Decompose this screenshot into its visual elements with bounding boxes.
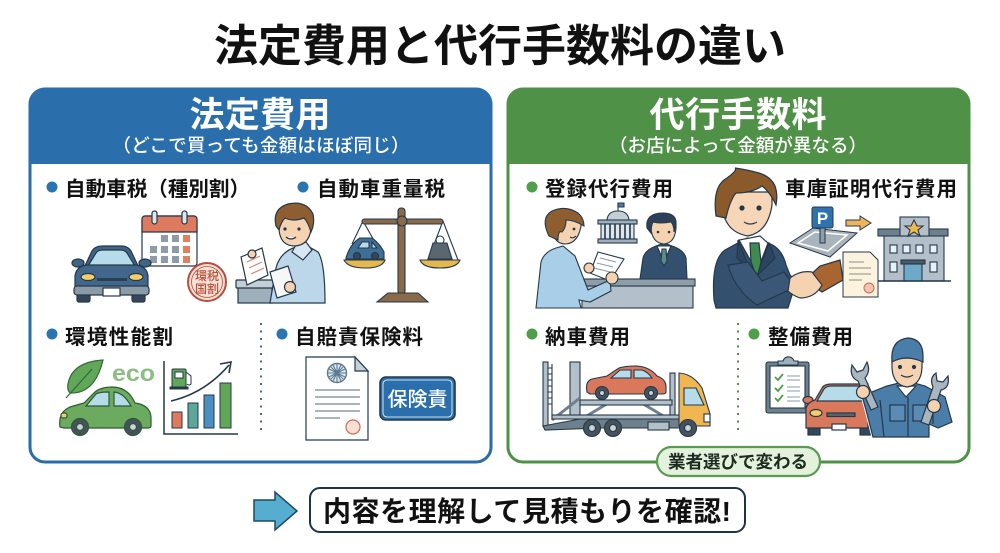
bullet (276, 328, 288, 340)
divider (737, 323, 739, 435)
insurance badge: 保険責 (388, 388, 448, 411)
label: 自動車重量税 (317, 178, 446, 201)
icon: clerk (640, 213, 687, 279)
icon: calendar (142, 211, 197, 266)
label: 登録代行費用 (545, 178, 673, 201)
arrow: parking to police station (846, 216, 871, 230)
icon: counter (580, 279, 695, 308)
panel subheading: （どこで買っても金額はほぼ同じ） (112, 135, 410, 156)
bullet (526, 328, 538, 340)
panel frame (508, 89, 969, 462)
label: 自動車税（種別割） (65, 178, 250, 201)
icon: tax stamp (188, 263, 226, 301)
divider (260, 323, 262, 435)
panel header band (507, 88, 970, 164)
callout: conclusion: 内容を理解して見積もりを確認! (323, 496, 731, 527)
left wrench (851, 362, 878, 410)
icon: green car (60, 387, 151, 436)
insurance badge (380, 377, 455, 420)
item: 自動車税 (46, 178, 250, 302)
icon: orange car on deck (587, 366, 666, 400)
title: 法定費用と代行手数料の違い (214, 22, 786, 71)
icon: police station (878, 217, 951, 281)
panel header band (29, 88, 492, 164)
panel: 法定費用 (29, 88, 492, 462)
icon: tax stamp: 国割 (195, 282, 219, 296)
panel heading: 代行手数料 (650, 96, 826, 135)
label: 環境性能割 (65, 326, 173, 349)
item: 車庫証明代行費用 (713, 168, 957, 308)
icon: car carrier truck (543, 362, 710, 436)
bullet (46, 182, 58, 192)
icon: leaf (66, 360, 103, 398)
item: 自賠責保険料 (276, 326, 455, 440)
icon: government building (598, 203, 637, 243)
right wrench (921, 373, 948, 425)
panel frame (30, 89, 491, 462)
icon: fuel pump (170, 369, 191, 389)
bullet (46, 328, 58, 340)
label: 自賠責保険料 (295, 326, 424, 349)
panel: 代行手数料 (507, 88, 970, 476)
bullet (526, 182, 538, 192)
eco label: eco (112, 360, 155, 386)
callout: conclusion (310, 488, 745, 532)
icon: balance scale (344, 208, 460, 302)
icon: person posting document (236, 203, 325, 303)
label: 車庫証明代行費用 (785, 178, 957, 201)
arrow: conclusion (254, 492, 297, 530)
item: 自動車重量税 (236, 178, 460, 303)
item: 整備費用 (748, 326, 952, 437)
icon: checklist clipboard (766, 357, 809, 413)
icon: insurance certificate (306, 357, 368, 440)
icon: parking area: P (817, 209, 828, 228)
item: 納車費用 (526, 326, 710, 436)
panel subheading: （お店によって金額が異なる） (609, 135, 867, 156)
icon: mechanic with wrenches (851, 338, 952, 437)
icon: certificate document (843, 252, 878, 297)
icon: parking area (790, 207, 857, 257)
icon: front car (72, 246, 151, 302)
bullet (748, 328, 760, 340)
icon: customer with form (536, 208, 624, 308)
callout: 業者選びで変わる: 業者選びで変わる (668, 452, 808, 472)
label: 納車費用 (545, 326, 630, 349)
icon: businessman handshake (713, 168, 843, 308)
panel heading: 法定費用 (190, 96, 330, 135)
item: 環境性能割 (46, 326, 238, 436)
icon: tax stamp: 環税 (195, 269, 219, 283)
item: 登録代行費用 (526, 178, 695, 308)
bullet (298, 182, 308, 192)
callout: 業者選びで変わる (657, 447, 820, 476)
icon: orange car front (803, 384, 873, 435)
chart: rising bars (164, 361, 238, 434)
label: 整備費用 (768, 326, 853, 349)
